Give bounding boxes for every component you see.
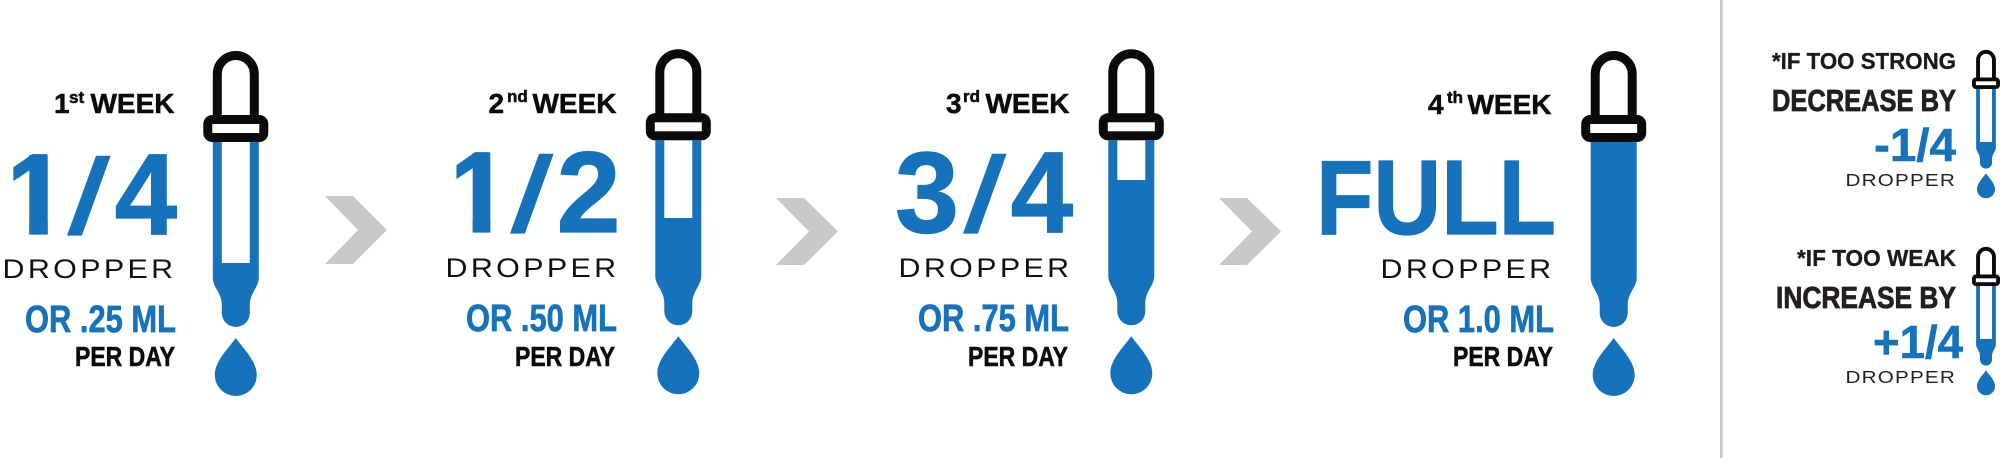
heading: 1st week: st — [69, 88, 84, 107]
amount: plus 1/4: +1/4 — [1873, 316, 1963, 368]
heading: 3rd week: 3 — [946, 88, 962, 119]
label: dropper: DROPPER — [1846, 367, 1956, 387]
heading: if too strong: *IF TOO STRONG — [1772, 48, 1956, 74]
text: increase by: INCREASE BY — [1776, 280, 1956, 315]
label: dropper: DROPPER — [898, 253, 1072, 283]
volume: 1.0 ml: OR 1.0 ML — [1403, 299, 1554, 341]
panel: week 4 — [1316, 56, 1646, 396]
heading: 4th week: WEEK — [1468, 89, 1552, 120]
amount: 1/4: 4 — [115, 131, 177, 259]
heading: 4th week: th — [1447, 88, 1463, 107]
amount: 1/4: 1 — [6, 130, 67, 259]
amount: 3/4: / — [959, 135, 1010, 254]
heading: 4th week: 4 — [1428, 89, 1444, 120]
icon: dropper full — [1581, 56, 1646, 396]
heading: 2nd week: 2 — [488, 88, 504, 119]
heading: 3rd week: WEEK — [986, 88, 1070, 119]
label: dropper: DROPPER — [2, 254, 176, 284]
volume: .50 ml: OR .50 ML — [466, 298, 617, 340]
amount: 3/4: 3 — [895, 129, 959, 257]
arrow: week 3 to 4 — [1219, 198, 1281, 265]
volume: .25 ml: OR .25 ML — [25, 299, 176, 341]
arrow: week 2 to 3 — [776, 198, 838, 265]
heading: 2nd week: nd — [507, 87, 528, 106]
amount: 1/4: / — [63, 137, 114, 256]
label: per day: PER DAY — [515, 341, 615, 372]
amount: 1/2 — [444, 129, 621, 257]
panel: if too strong — [1772, 48, 2000, 198]
heading: if too weak: *IF TOO WEAK — [1797, 245, 1956, 271]
icon: small dropper — [1972, 249, 2000, 395]
amount: 1/2: 2 — [557, 129, 621, 257]
volume: .75 ml: OR .75 ML — [918, 298, 1069, 340]
amount: 3/4 — [895, 129, 1073, 257]
panel: if too weak — [1776, 245, 2000, 395]
icon: dropper half full — [646, 54, 711, 394]
amount: 3/4: 4 — [1011, 129, 1073, 257]
heading: 1st week: WEEK — [90, 88, 174, 119]
icon: dropper quarter full — [203, 56, 268, 396]
label: per day: PER DAY — [1453, 341, 1553, 372]
panel: week 3 — [895, 54, 1164, 394]
heading: 2nd week: WEEK — [532, 88, 616, 119]
amount: full: FULL — [1316, 139, 1556, 257]
label: dropper: DROPPER — [1380, 254, 1554, 284]
amount: 1/4 — [0, 130, 177, 259]
amount: minus 1/4: -1/4 — [1874, 119, 1956, 171]
panel: week 1 — [0, 56, 268, 396]
heading: 1st week: 1 — [54, 88, 70, 119]
label: dropper: DROPPER — [1846, 170, 1956, 190]
icon: dropper three-quarters full — [1099, 54, 1164, 394]
label: dropper: DROPPER — [446, 253, 620, 283]
arrow: week 1 to 2 — [325, 196, 387, 264]
label: per day: PER DAY — [968, 341, 1068, 372]
label: per day: PER DAY — [75, 341, 175, 372]
divider — [1720, 0, 1723, 458]
amount: 1/2: 1 — [450, 129, 509, 257]
amount: 1/2: / — [506, 135, 557, 254]
panel: week 2 — [444, 54, 711, 394]
text: decrease by: DECREASE BY — [1772, 83, 1956, 118]
icon: small dropper — [1972, 52, 2000, 198]
heading: 3rd week: rd — [963, 87, 980, 106]
